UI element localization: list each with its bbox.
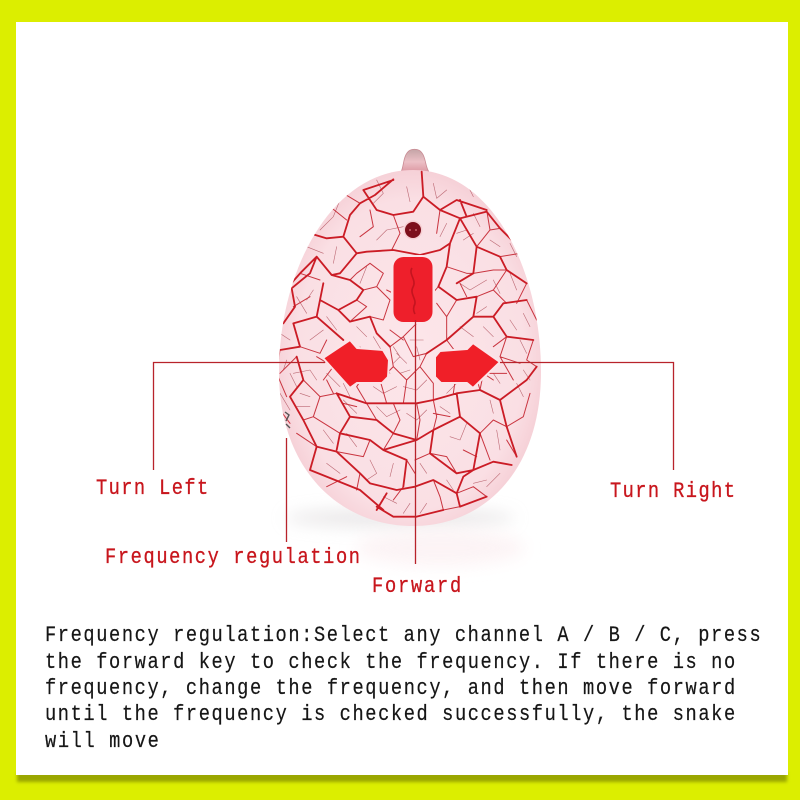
description text block: the forward key to check the frequency. If there is no	[45, 651, 735, 676]
egg top nub	[401, 149, 429, 174]
crack pattern	[273, 172, 537, 517]
label: forward: Forward	[372, 575, 461, 600]
label: turn left: Turn Left	[96, 477, 208, 502]
description text block	[45, 624, 761, 755]
egg floor shadow and reflection	[285, 508, 525, 566]
description text block: frequency, change the frequency, and then move forward	[45, 677, 735, 702]
description text block: will move	[45, 730, 159, 755]
label: turn right: Turn Right	[610, 480, 735, 505]
description text block: until the frequency is checked successfully, the snake	[45, 703, 735, 728]
leader line: frequency regulation	[286, 438, 288, 542]
remote control egg	[273, 149, 541, 526]
leader line: forward	[414, 320, 416, 564]
label: frequency regulation: Frequency regulation	[105, 546, 360, 571]
indicator light	[404, 220, 422, 240]
left arrow button	[323, 340, 389, 388]
side printed marks	[285, 412, 290, 428]
panel shadow	[17, 772, 787, 782]
leader line: turn right	[500, 362, 674, 470]
description text block: Frequency regulation:Select any channel A / B / C, press	[45, 624, 761, 649]
egg body	[279, 170, 541, 526]
right arrow button	[435, 343, 500, 388]
leader line: turn left	[154, 362, 325, 470]
forward button	[391, 255, 435, 324]
